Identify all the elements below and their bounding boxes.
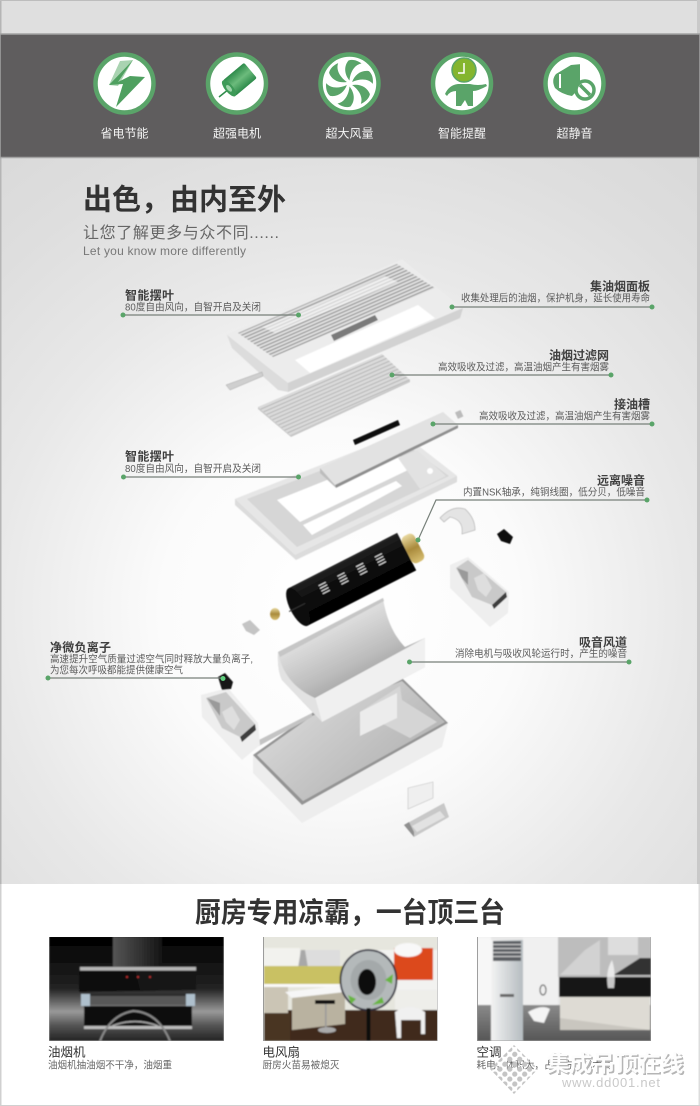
caption: electric fan: [262, 1044, 340, 1072]
feature: large airflow: [320, 54, 378, 140]
callout: oil tray: 接油槽: [614, 396, 650, 412]
panel: comparison section: [48, 898, 684, 1094]
callout: negative ions: [46, 640, 253, 681]
callout: negative ions: 高速提升空气质量过滤空气同时释放大量负离子,: [50, 652, 253, 666]
callout: smart louver lower: 80度自由风向，自智开启及关闭: [125, 462, 261, 475]
heading: section title: [83, 184, 286, 258]
panel: feature band: [0, 34, 700, 158]
callout: smart louver lower: [121, 448, 301, 480]
heading: section title: 出色，由内至外: [83, 184, 286, 216]
photo: electric fan in kitchen: [263, 936, 438, 1041]
caption: air conditioner: 耗电，体积大，占地方，成本高: [476, 1058, 612, 1072]
callout: oil fume panel: 集油烟面板: [590, 278, 650, 294]
feature: energy saving: 省电节能: [100, 126, 149, 140]
callout: smart louver top: [120, 288, 301, 318]
photo: air conditioner in kitchen: [477, 936, 651, 1041]
watermark: 集成吊顶在线: [548, 1053, 685, 1078]
callout: negative ions: 净微负离子: [50, 640, 111, 654]
part: right side block: [450, 557, 509, 627]
feature: strong motor: [208, 54, 266, 140]
part: oil tray: [320, 410, 463, 488]
part: housing box: [253, 678, 448, 823]
callout: smart louver top: 智能摆叶: [125, 288, 174, 302]
callout: smart louver lower: 智能摆叶: [125, 448, 174, 464]
callout: oil filter: [390, 348, 614, 378]
part: bracket clip: [242, 620, 260, 635]
watermark: www.dd001.net: [561, 1075, 660, 1090]
part: cover plate: [408, 782, 433, 809]
part: left side block: [201, 688, 260, 760]
part: end cap arch: [440, 508, 475, 534]
part: mounting frame: [235, 433, 457, 560]
heading: comparison title: 厨房专用凉霸，一台顶三台: [195, 896, 505, 928]
photo: range hood: [49, 936, 224, 1041]
part: brass bushing: [270, 608, 280, 620]
part: filter mesh: [258, 354, 410, 437]
callout: oil fume panel: [450, 278, 654, 310]
callout: oil filter: 油烟过滤网: [549, 348, 609, 362]
watermark: [490, 1045, 685, 1094]
callout: oil tray: 高效吸收及过滤，高温油烟产生有害烟雾: [479, 410, 650, 422]
callout: sound absorbing duct: 消除电机与吸收风轮运行时，产生的噪音: [455, 647, 627, 660]
callout: oil fume panel: 收集处理后的油烟，保护机身，延长使用寿命: [461, 292, 650, 304]
feature: ultra quiet: [546, 54, 604, 140]
caption: range hood: 油烟机抽油烟不干净，油烟重: [48, 1058, 172, 1072]
part: front panel: [226, 259, 463, 392]
callout: sound absorbing duct: 吸音风道: [579, 634, 627, 650]
part: black chip: [497, 529, 513, 544]
part: small tray: [404, 803, 449, 837]
callout: away from noise: 内置NSK轴承，纯铜线圈，低分贝，低噪音: [463, 486, 645, 498]
callout: away from noise: [416, 472, 650, 542]
watermark: 集成吊顶在线: [546, 1052, 684, 1076]
page background: [0, 0, 700, 884]
caption: air conditioner: 空调: [476, 1046, 502, 1060]
part: ion generator: [218, 673, 233, 690]
feature: smart reminder: 智能提醒: [438, 126, 486, 140]
callout: sound absorbing duct: [407, 634, 632, 664]
callout: smart louver top: 80度自由风向，自智开启及关闭: [125, 300, 261, 314]
feature: smart reminder: [433, 54, 491, 140]
feature: large airflow: 超大风量: [325, 126, 374, 140]
caption: electric fan: 电风扇: [262, 1044, 300, 1060]
callout: oil filter: 高效吸收及过滤，高温油烟产生有害烟雾: [438, 360, 609, 374]
caption: range hood: [48, 1046, 172, 1072]
heading: section title: 让您了解更多与众不同......: [83, 224, 279, 242]
callout: oil tray: [430, 396, 654, 426]
exploded product diagram: [201, 259, 513, 837]
callout: away from noise: 远离噪音: [597, 472, 645, 488]
feature: energy saving: [96, 54, 154, 140]
callout: negative ions: 为您每次呼吸都能提供健康空气: [50, 664, 183, 676]
caption: air conditioner: [476, 1046, 612, 1072]
feature: strong motor: 超强电机: [213, 126, 261, 140]
caption: range hood: 油烟机: [48, 1046, 86, 1060]
part: sound absorbing duct: [278, 598, 425, 722]
caption: electric fan: 厨房火苗易被熄灭: [262, 1058, 340, 1072]
heading: section title: Let you know more differently: [83, 244, 246, 258]
part: blower wheel: [280, 527, 429, 630]
feature: ultra quiet: 超静音: [556, 126, 593, 140]
